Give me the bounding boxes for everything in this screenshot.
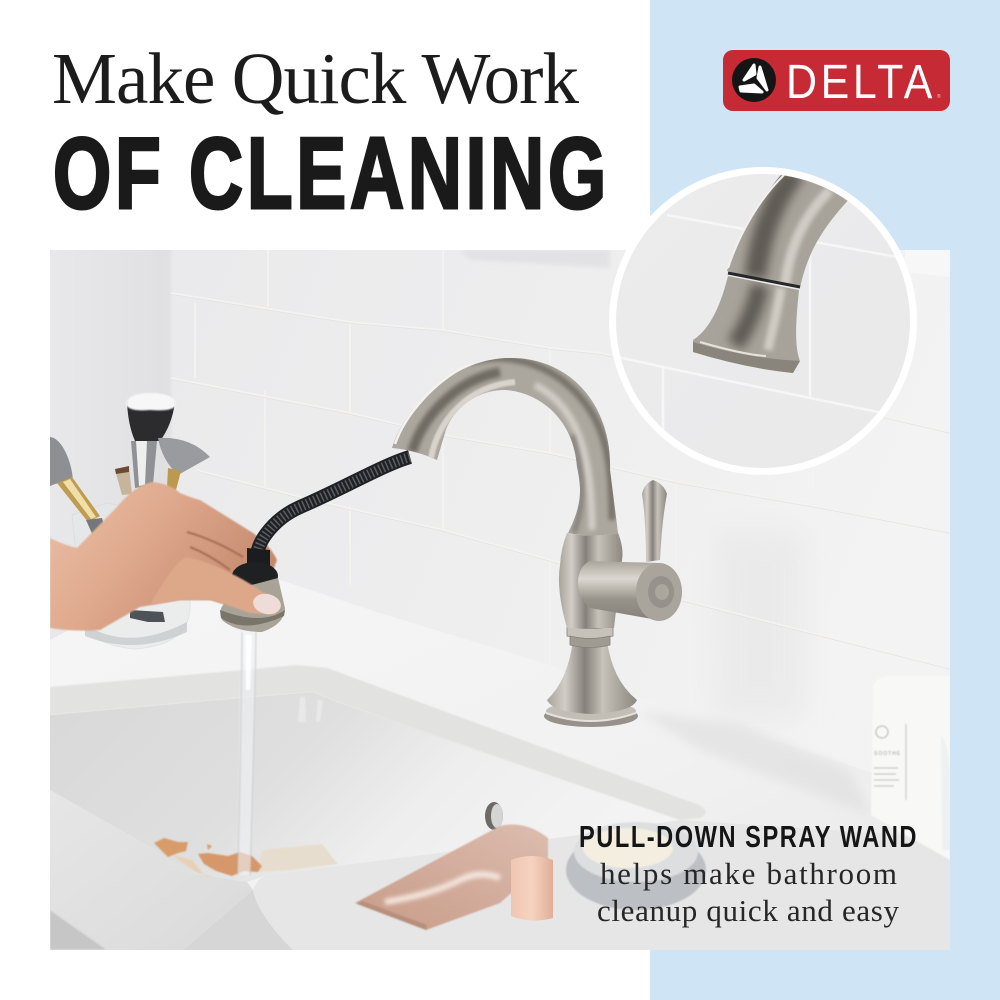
background: white left area — [0, 0, 650, 1000]
title line 1: Make Quick Work — [52, 38, 580, 119]
wand head — [220, 578, 285, 632]
hand — [50, 482, 277, 631]
background: light blue right panel — [650, 0, 1000, 1000]
title line 2: OF CLEANING — [53, 118, 610, 230]
faucet base cone — [547, 640, 637, 714]
faucet — [392, 358, 682, 727]
bottle label text: SOOTHE — [874, 751, 901, 757]
makeup tube — [355, 824, 548, 930]
wand collar — [232, 562, 278, 590]
Delta logo — [723, 50, 950, 111]
brush: small — [115, 467, 132, 495]
pull-down hose — [257, 457, 410, 556]
logo red badge — [723, 50, 950, 111]
logo emblem — [732, 58, 776, 102]
inset white ring — [609, 167, 917, 475]
inset circle: spray head close-up — [600, 160, 930, 490]
shelf edge — [466, 251, 609, 266]
main photo: bathroom faucet scene — [50, 240, 951, 950]
faucet handle cap — [636, 563, 682, 621]
spray head base highlight — [700, 342, 766, 356]
sink — [50, 665, 752, 950]
brush: fan — [158, 438, 210, 490]
front counter — [253, 820, 752, 950]
wand connector — [247, 548, 270, 566]
makeup stain — [154, 838, 338, 878]
running water — [238, 632, 257, 875]
finger creases — [187, 532, 243, 570]
inset tile background — [600, 160, 930, 490]
overflow hole — [485, 802, 503, 830]
brush: centre powder — [126, 393, 176, 488]
wall reflection shade — [715, 530, 805, 720]
compact powder — [566, 822, 706, 910]
faucet spout — [392, 358, 618, 536]
faucet shadow on counter — [660, 718, 858, 804]
thumb — [150, 557, 279, 615]
sink basin — [50, 692, 440, 882]
caption line 2: cleanup quick and easy — [597, 893, 900, 928]
faucet lever — [642, 480, 667, 562]
faucet handle cylinder — [578, 561, 682, 620]
seam — [728, 273, 800, 287]
brush tips in glass — [130, 610, 165, 622]
caption — [579, 819, 918, 928]
faucet body — [559, 533, 622, 628]
title — [52, 38, 610, 230]
logo wordmark: DELTA — [786, 56, 936, 109]
thumbnail — [251, 591, 283, 617]
lower basin surface — [50, 790, 253, 950]
registered mark: ® — [937, 93, 941, 100]
bottom-left wedge — [50, 910, 107, 950]
tile lines — [600, 215, 917, 445]
curved crescent — [183, 890, 293, 950]
brush: left — [50, 437, 104, 538]
faucet rings — [567, 626, 613, 638]
caption line 1: helps make bathroom — [600, 856, 898, 891]
bottle on right — [872, 724, 950, 860]
sink rim — [50, 665, 706, 820]
hand holding wand — [50, 457, 410, 632]
spray head — [693, 276, 800, 380]
tile wall — [50, 240, 951, 810]
tube cap — [511, 856, 553, 921]
spray neck — [727, 170, 852, 288]
basin highlight — [298, 697, 323, 722]
faucet base disc — [544, 706, 638, 727]
countertop — [50, 565, 950, 950]
glass cup — [72, 503, 190, 649]
makeup brushes and glass — [50, 393, 210, 649]
